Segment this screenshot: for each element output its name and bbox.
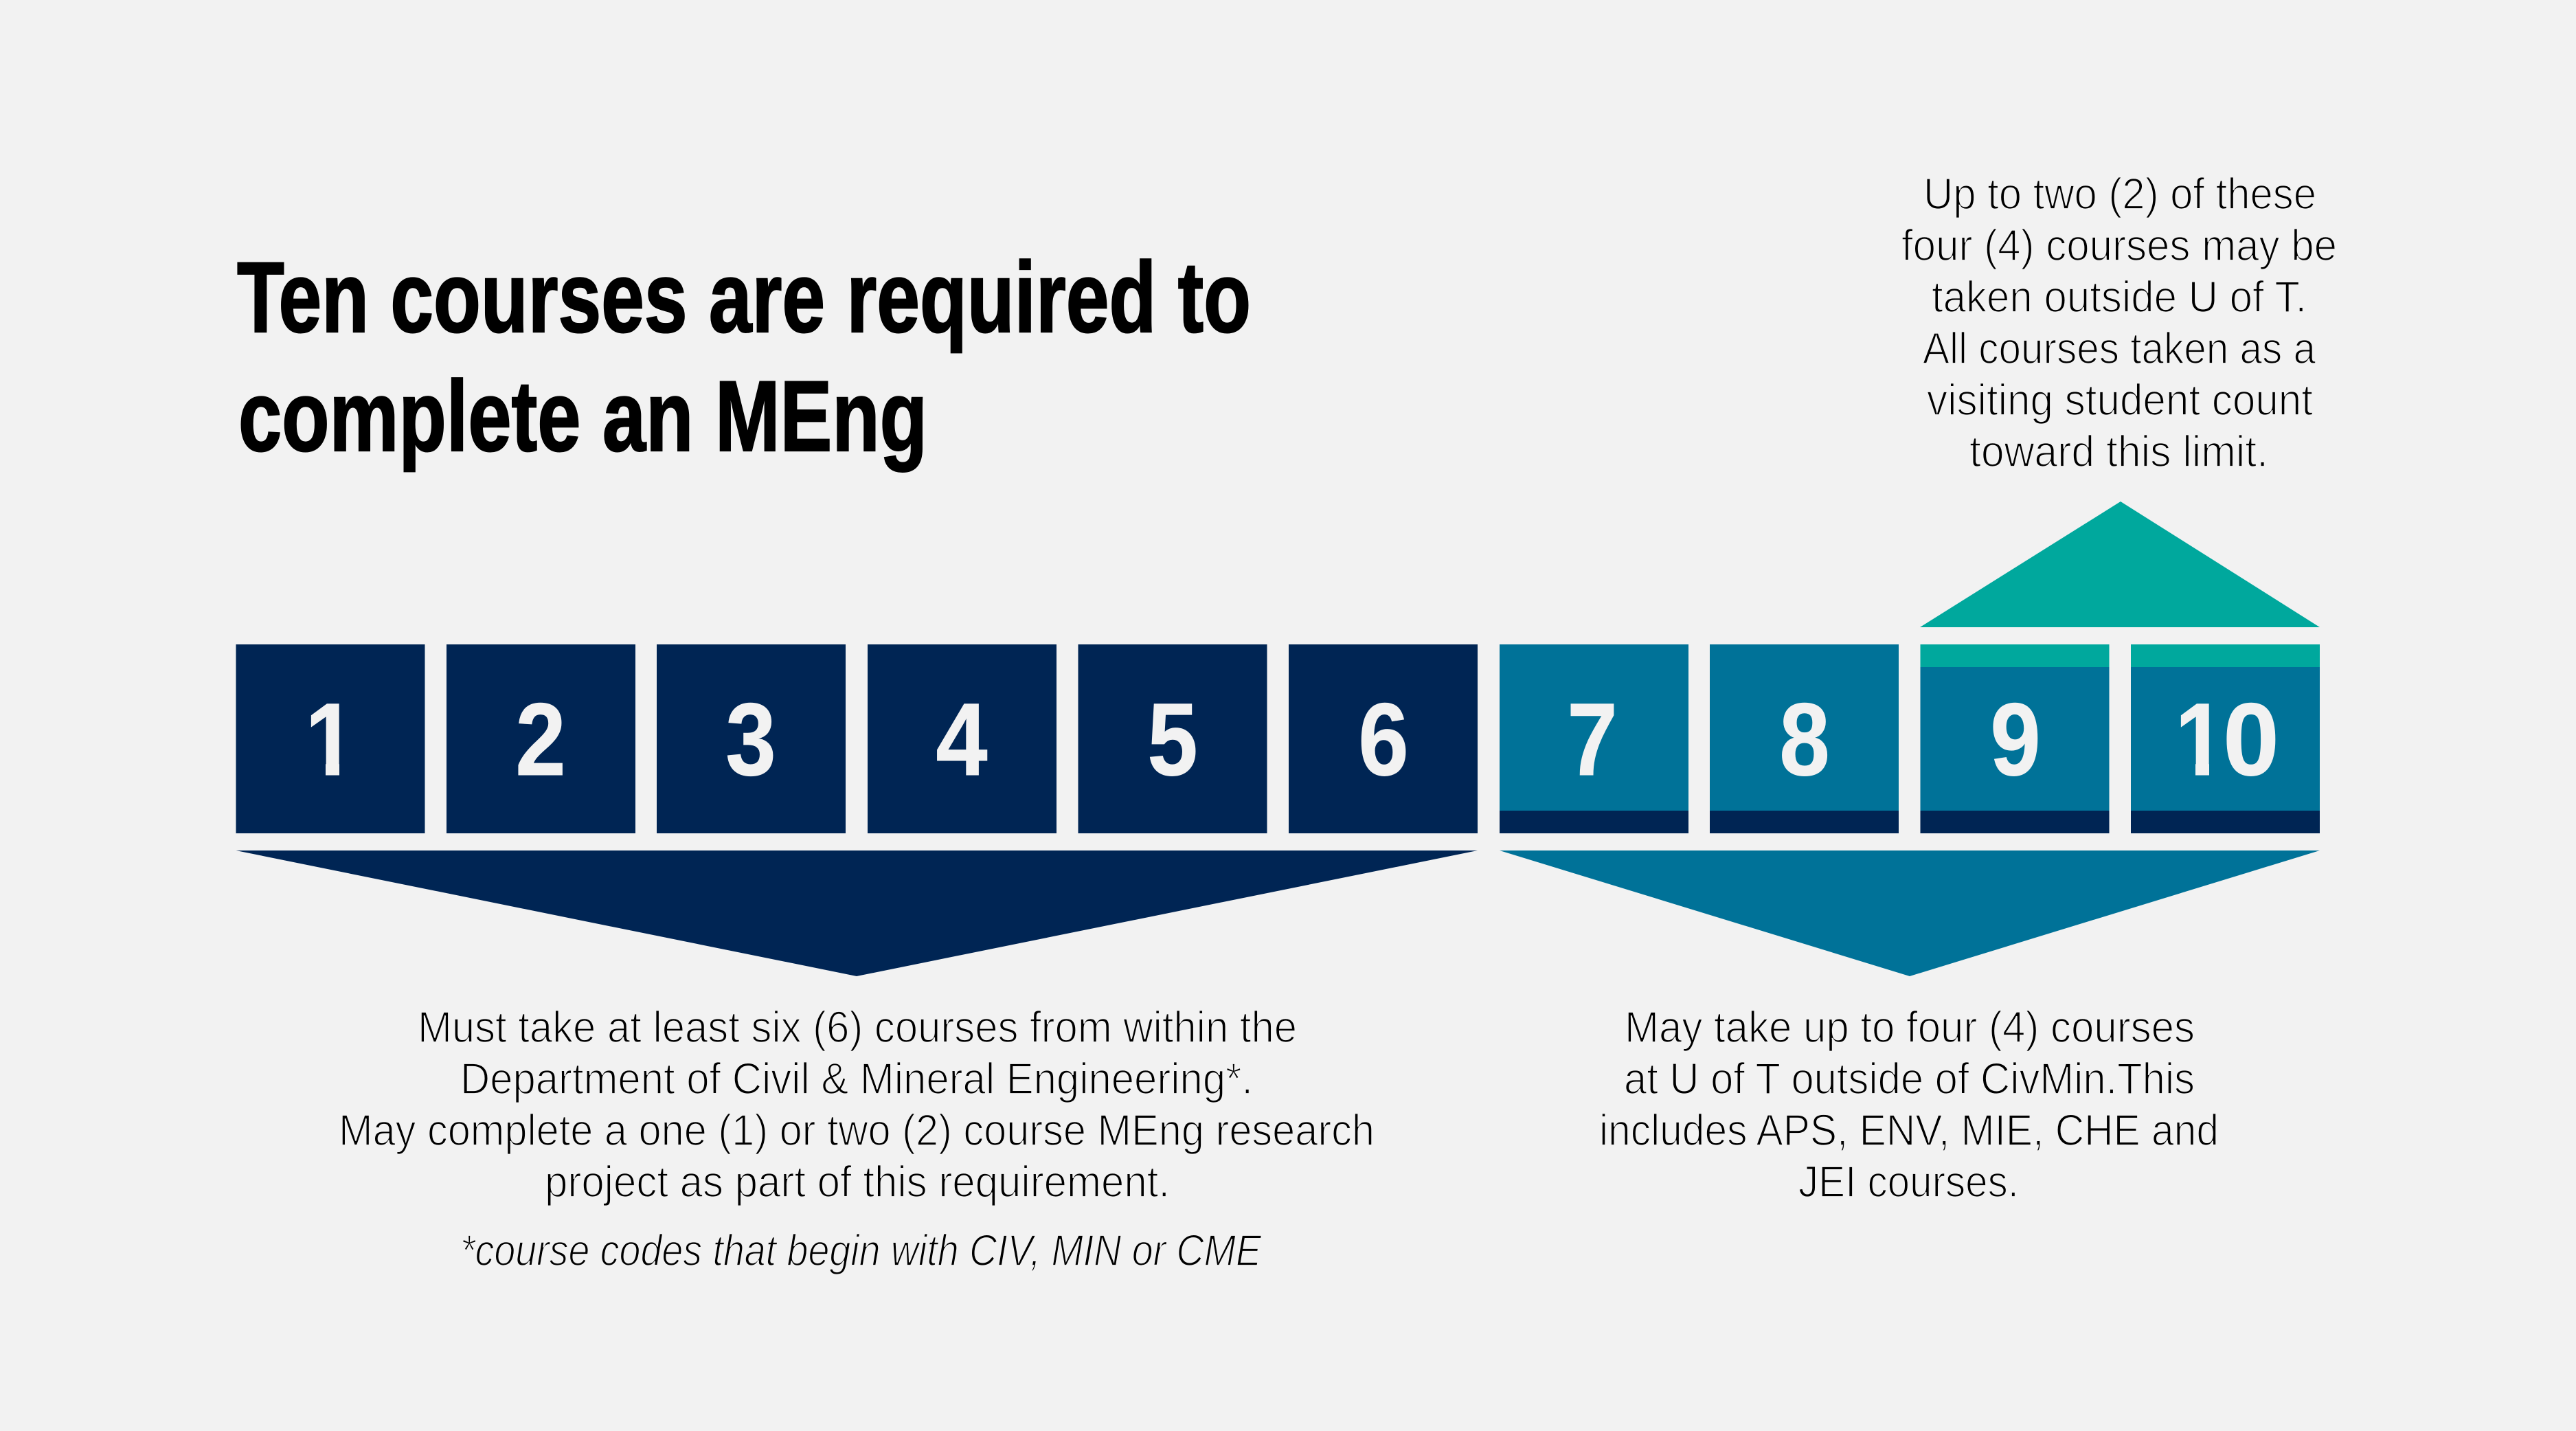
course 2 bbox=[447, 644, 635, 833]
course 7 bbox=[1500, 644, 1688, 833]
course 10: 1 bbox=[2175, 681, 2226, 797]
title bbox=[237, 241, 1251, 472]
text block: outside CivMin allowance bbox=[1599, 1002, 2219, 1206]
text block: department requirement bbox=[339, 1002, 1375, 1206]
course blocks row bbox=[236, 644, 2320, 833]
text block: department requirement: project as part of this requirement. bbox=[545, 1157, 1170, 1206]
course 9: 9 bbox=[1990, 681, 2041, 797]
course 8: 8 bbox=[1779, 681, 1830, 797]
course 1: 1 bbox=[305, 681, 356, 797]
text block: outside CivMin allowance: at U of T outside of CivMin.This bbox=[1624, 1054, 2195, 1103]
course 4: 4 bbox=[936, 682, 988, 798]
course 2: 2 bbox=[515, 681, 566, 797]
course 3: 3 bbox=[725, 681, 776, 797]
callout: outside U of T limit: four (4) courses may be bbox=[1901, 221, 2337, 270]
callout: outside U of T limit bbox=[1901, 169, 2337, 476]
course 6: 6 bbox=[1358, 681, 1409, 797]
callout: outside U of T limit: All courses taken as a bbox=[1923, 324, 2316, 373]
text block: department requirement: Department of Civil & Mineral Engineering*. bbox=[460, 1054, 1253, 1103]
course 6 bbox=[1289, 644, 1478, 833]
text block: department requirement: May complete a one (1) or two (2) course MEng research bbox=[339, 1105, 1375, 1155]
callout: outside U of T limit: Up to two (2) of these bbox=[1923, 169, 2316, 218]
course 8 bbox=[1710, 644, 1899, 833]
course 1 bbox=[236, 644, 425, 833]
course 9 bbox=[1921, 644, 2109, 833]
arrow: teal up triangle bbox=[1920, 502, 2320, 627]
text block: outside CivMin allowance: May take up to four (4) courses bbox=[1625, 1002, 2195, 1052]
course 7: 7 bbox=[1567, 681, 1618, 797]
course 10: 0 bbox=[2223, 683, 2279, 797]
callout: outside U of T limit: visiting student count bbox=[1927, 375, 2313, 425]
callout: outside U of T limit: taken outside U of T. bbox=[1932, 272, 2307, 322]
title: Ten courses are required to bbox=[237, 241, 1251, 353]
text block: department requirement: Must take at least six (6) courses from within the bbox=[418, 1002, 1297, 1052]
text block: outside CivMin allowance: includes APS, ENV, MIE, CHE and bbox=[1599, 1105, 2219, 1155]
course 10 bbox=[2131, 644, 2320, 833]
title: complete an MEng bbox=[238, 360, 927, 472]
course 3 bbox=[657, 644, 846, 833]
course 5: 5 bbox=[1147, 681, 1198, 797]
footnote: *course codes that begin with CIV, MIN or CME bbox=[460, 1226, 1262, 1275]
callout: outside U of T limit: toward this limit. bbox=[1969, 427, 2268, 476]
course 5 bbox=[1078, 644, 1267, 833]
course 4 bbox=[868, 644, 1057, 833]
arrow: blue down triangle bbox=[1500, 850, 2320, 976]
arrow: navy down triangle bbox=[236, 850, 1478, 976]
text block: outside CivMin allowance: JEI courses. bbox=[1798, 1157, 2019, 1206]
